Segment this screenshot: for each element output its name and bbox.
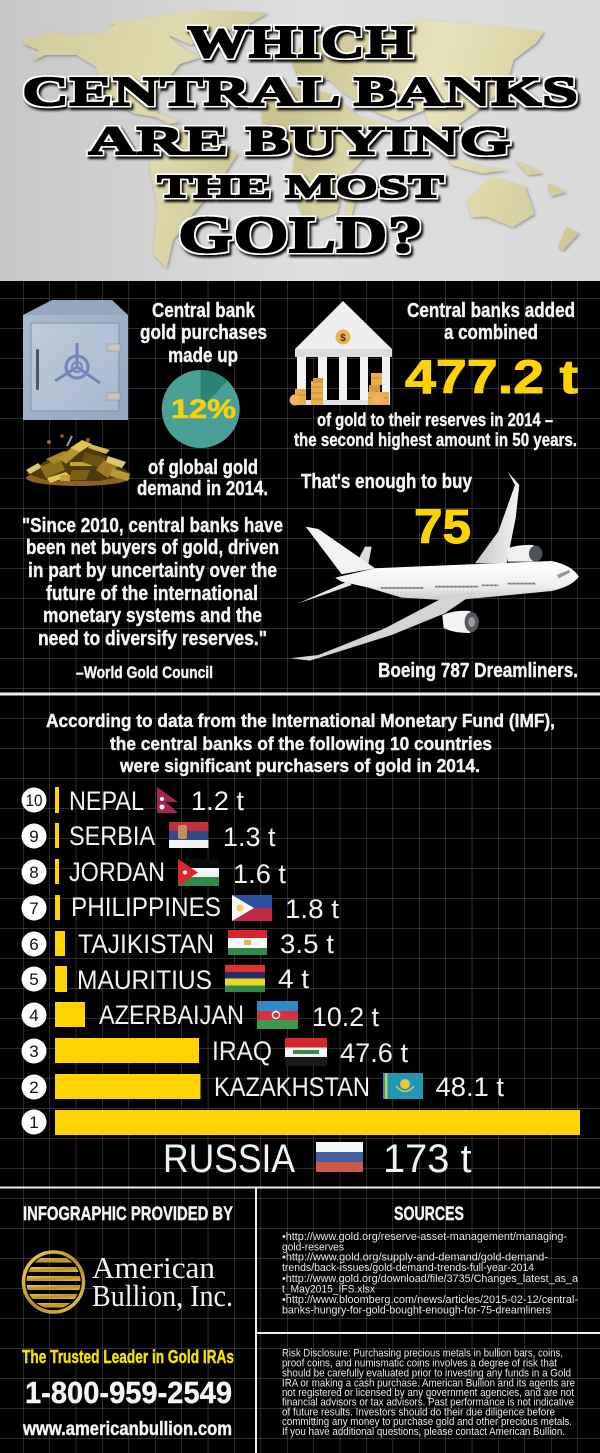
- icon: safe: [23, 300, 128, 420]
- title: THE MOST: [157, 168, 444, 204]
- source links: t_May2015_IFS.xlsx: [282, 1284, 376, 1296]
- text: gold purchases made up: gold purchases: [140, 322, 267, 344]
- panel: risk disclosure: not registered or licensed by any government agencies, and are not: [282, 1387, 574, 1399]
- panel: combined purchases: [290, 300, 579, 682]
- text: ranking intro: According to data from the International Monetary Fund (IMF),: [46, 710, 555, 731]
- quote: World Gold Council: –World Gold Council: [76, 663, 213, 682]
- text: gold purchases made up: Central bank: [152, 300, 256, 322]
- row: Azerbaijan: AZERBAIJAN: [99, 1000, 244, 1030]
- panel: central bank share: [22, 300, 283, 682]
- row: Russia: 1: [29, 1113, 39, 1132]
- row: Mauritius: 4 t: [278, 964, 310, 994]
- panel: risk disclosure: If you have additional questions, please contact American Bullion.: [282, 1426, 565, 1438]
- panel: risk disclosure: IRA or making a cash purchase. American Bullion and its agents are: [282, 1378, 575, 1390]
- row: Serbia: 9: [29, 827, 39, 846]
- quote: World Gold Council: future of the international: [46, 583, 258, 605]
- panel: risk disclosure: Risk Disclosure: Purchasing precious metals in bullion bars, coins,: [282, 1348, 563, 1360]
- row: Russia: RUSSIA: [163, 1137, 295, 1181]
- row: Tajikistan: [22, 929, 335, 959]
- quote: World Gold Council: in part by uncertainty over the: [28, 560, 277, 582]
- logo: American Bullion: Bullion, Inc.: [92, 1278, 233, 1313]
- title: CENTRAL BANKS: [22, 68, 578, 114]
- row: Tajikistan: 6: [29, 935, 39, 954]
- source links: trends/back-issues/gold-demand-trends-full-year-2014: [282, 1262, 534, 1274]
- panel: sources: [282, 1204, 578, 1316]
- divider: footer right: [256, 1332, 600, 1334]
- source links: [282, 1231, 578, 1316]
- heading: infographic provided by: INFOGRAPHIC PROVIDED BY: [23, 1204, 233, 1225]
- row: Mauritius: [22, 964, 310, 995]
- row: Kazakhstan: [22, 1072, 504, 1102]
- icon: airplane: [290, 472, 579, 661]
- quote: World Gold Council: monetary systems and the: [43, 605, 262, 627]
- title: [22, 16, 578, 264]
- row: Mauritius: 5: [29, 970, 39, 989]
- row: Nepal: [22, 786, 244, 816]
- pie chart: 12 percent: 12%: [171, 394, 236, 424]
- source links: •http://www.gold.org/reserve-asset-management/managing-: [282, 1231, 567, 1243]
- text: central banks added: [407, 300, 575, 344]
- row: Iraq: 3: [29, 1042, 39, 1061]
- row: Serbia: SERBIA: [69, 821, 155, 851]
- icon: bank with coins: $: [340, 333, 346, 344]
- heading: sources: SOURCES: [394, 1204, 464, 1225]
- divider: footer top: [0, 1186, 600, 1188]
- source links: gold-reserves: [282, 1242, 345, 1254]
- divider: panel separator: [0, 692, 600, 696]
- row: Iraq: [22, 1036, 408, 1068]
- row: Philippines: [22, 892, 340, 924]
- row: Russia: 173 t: [383, 1137, 472, 1181]
- panel: risk disclosure: should be carefully evaluated prior to investing any funds in a Gold: [282, 1368, 571, 1380]
- row: Tajikistan: TAJIKISTAN: [78, 929, 214, 959]
- text: of global gold demand: of global gold: [148, 457, 258, 479]
- row: Kazakhstan: 48.1 t: [436, 1072, 504, 1102]
- row: Philippines: 7: [29, 899, 39, 918]
- panel: risk disclosure: proof coins, and numismatic coins involves a degree of risk that: [282, 1358, 557, 1370]
- source links: •http://www.gold.org/download/file/3735/Changes_latest_as_a: [282, 1273, 578, 1285]
- icon: gold pile: [26, 434, 131, 486]
- row: Mauritius: MAURITIUS: [77, 965, 212, 995]
- row: Iraq: 47.6 t: [340, 1038, 408, 1068]
- logo: American Bullion: American: [92, 1250, 215, 1285]
- text: gold purchases made up: [140, 300, 267, 367]
- tagline: The Trusted Leader in Gold IRAs: [22, 1347, 234, 1367]
- row: Kazakhstan: 2: [29, 1078, 39, 1097]
- row: Azerbaijan: 10.2 t: [312, 1002, 379, 1032]
- text: central banks added: Central banks added: [407, 300, 575, 322]
- text: gold purchases made up: made up: [168, 345, 238, 367]
- phone number: 1-800-959-2549: [25, 1375, 232, 1410]
- panel: provider: [20, 1204, 234, 1440]
- panel: risk disclosure: committing any money to purchase gold and other precious metals.: [282, 1416, 572, 1428]
- title: WHICH: [187, 16, 413, 67]
- text: reserves in 2014: [294, 410, 577, 450]
- source links: •http://www.bloomberg.com/news/articles/2015-02-12/central-: [282, 1294, 578, 1306]
- text: central banks added: a combined: [444, 322, 538, 344]
- row: Philippines: PHILIPPINES: [71, 892, 221, 922]
- panel: risk disclosure: of future results. Investors should do their due diligence before: [282, 1406, 555, 1418]
- stat: 75: 75: [414, 501, 471, 554]
- source links: banks-hungry-for-gold-bought-enough-for-75-dreamliners: [282, 1304, 552, 1316]
- text: ranking intro: were significant purchasers of gold in 2014.: [119, 755, 480, 776]
- text: ranking intro: [46, 710, 555, 776]
- row: Jordan: [22, 857, 286, 889]
- quote: World Gold Council: been net buyers of gold, driven: [26, 537, 279, 559]
- row: Jordan: JORDAN: [69, 857, 165, 887]
- stat: 477.2 t: 477.2 t: [405, 350, 578, 403]
- text: reserves in 2014: of gold to their reserves in 2014 –: [317, 410, 553, 430]
- panel: ranking of 10 countries: [22, 710, 580, 1181]
- quote: World Gold Council: need to diversify reserves.": [38, 628, 267, 650]
- world map: [23, 11, 579, 268]
- pie chart: 12 percent: [162, 370, 240, 448]
- row: Nepal: NEPAL: [69, 786, 144, 816]
- row: Nepal: 1.2 t: [191, 786, 244, 816]
- panel: risk disclosure: [282, 1348, 575, 1438]
- quote: World Gold Council: [22, 515, 283, 682]
- website: www.americanbullion.com: [22, 1419, 232, 1440]
- row: Russia: [22, 1110, 580, 1181]
- row: Serbia: 1.3 t: [223, 822, 276, 852]
- text: of global gold demand: [137, 457, 268, 500]
- title: GOLD?: [178, 207, 423, 264]
- text: of global gold demand: demand in 2014.: [137, 478, 268, 500]
- text: ranking intro: the central banks of the following 10 countries: [110, 733, 492, 754]
- panel: risk disclosure: financial advisors or tax advisors. Past performance is not indicative: [282, 1396, 574, 1408]
- icon: bank with coins: [290, 301, 392, 406]
- hero banner: [0, 0, 600, 281]
- row: Azerbaijan: 4: [29, 1006, 39, 1025]
- row: Nepal: 10: [26, 791, 42, 810]
- quote: World Gold Council: "Since 2010, central banks have: [22, 515, 283, 537]
- row: Serbia: [22, 821, 276, 852]
- row: Azerbaijan: [22, 1000, 379, 1032]
- row: Tajikistan: 3.5 t: [280, 929, 335, 959]
- row: Iraq: IRAQ: [212, 1036, 272, 1066]
- row: Jordan: 8: [29, 863, 39, 882]
- source links: •http://www.gold.org/supply-and-demand/gold-demand-: [282, 1252, 548, 1264]
- row: Kazakhstan: KAZAKHSTAN: [214, 1072, 370, 1102]
- text: enough to buy: That's enough to buy: [301, 471, 473, 493]
- logo: American Bullion: [20, 1250, 233, 1313]
- row: Jordan: 1.6 t: [233, 859, 286, 889]
- title: ARE BUYING: [88, 118, 511, 163]
- row: Philippines: 1.8 t: [285, 894, 340, 924]
- divider: footer vertical: [255, 1187, 257, 1453]
